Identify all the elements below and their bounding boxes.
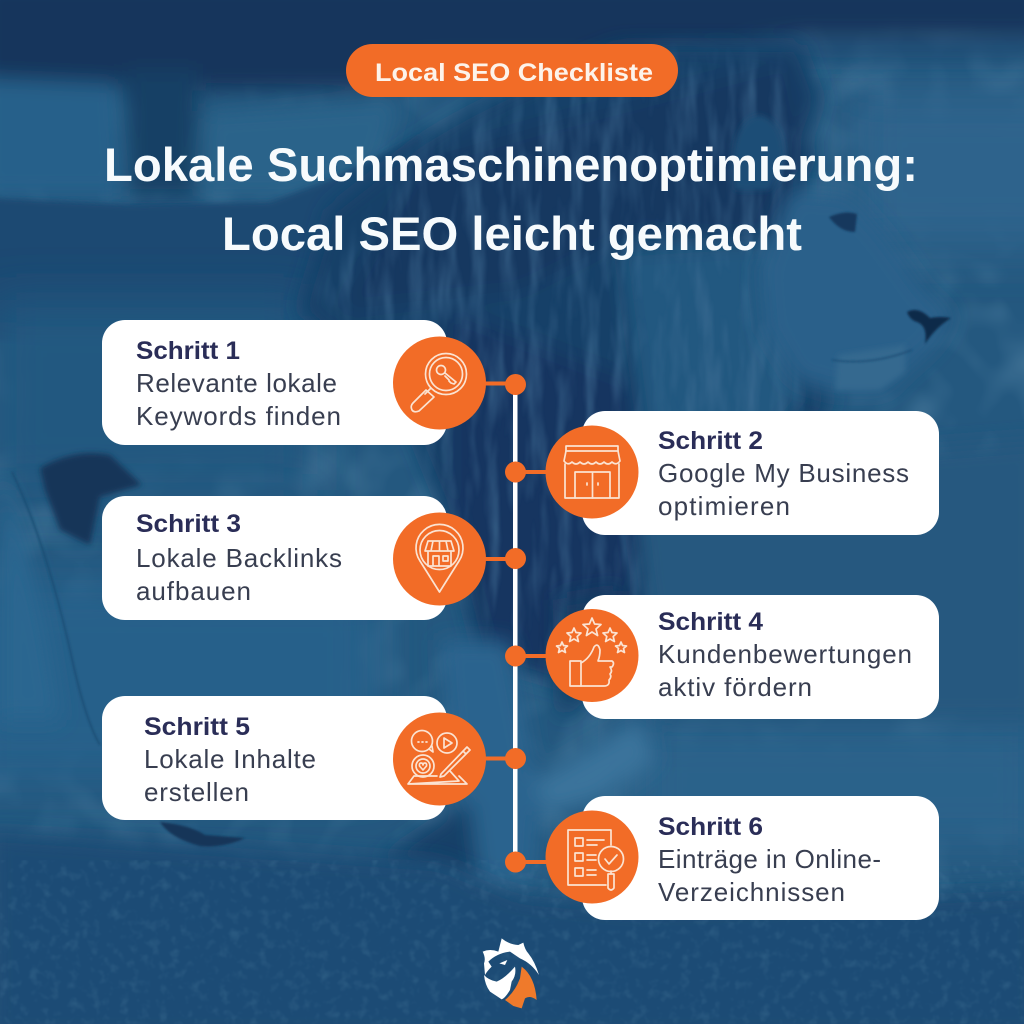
- panel: Schritt 1: Keywords finden: [136, 401, 341, 431]
- header pill: Local SEO Checkliste: [346, 44, 678, 97]
- panel: Schritt 5: Schritt 5: [144, 713, 250, 741]
- panel: Schritt 3: Schritt 3: [136, 510, 241, 538]
- panel: Schritt 1: Schritt 1: [136, 337, 240, 365]
- panel: Schritt 5: [102, 696, 447, 820]
- timeline spine: [480, 374, 550, 872]
- title: Lokale Suchmaschinenoptimierung:: [104, 138, 918, 191]
- soft large tonal zones: [0, 90, 1024, 850]
- panel: Schritt 1: [102, 320, 447, 445]
- icon: magnifier with key: [393, 336, 486, 430]
- panel: Schritt 5: erstellen: [144, 777, 249, 807]
- panel: Schritt 2: Google My Business: [658, 458, 909, 488]
- title: Local SEO leicht gemacht: [222, 207, 802, 260]
- legs and paw: [380, 440, 1024, 885]
- icon: stars and thumbs up: [546, 609, 638, 702]
- ear: [733, 115, 784, 190]
- icon: content creation: [393, 712, 486, 806]
- panel: Schritt 6: [582, 796, 939, 920]
- panel: Schritt 2: Schritt 2: [658, 427, 763, 455]
- panel: Schritt 6: Schritt 6: [658, 813, 763, 841]
- panel: Schritt 6: Verzeichnissen: [658, 877, 845, 907]
- panel: Schritt 3: [102, 496, 447, 620]
- mouth line: [832, 350, 912, 362]
- header pill: Local SEO Checkliste: Local SEO Checkliste: [375, 59, 653, 87]
- title: [104, 138, 918, 260]
- panel: Schritt 4: [582, 595, 939, 719]
- panel: Schritt 5: Lokale Inhalte: [144, 744, 316, 774]
- panel: Schritt 4: aktiv fördern: [658, 672, 812, 702]
- panel: Schritt 3: aufbauen: [136, 576, 251, 606]
- panel: Schritt 4: Kundenbewertungen: [658, 639, 912, 669]
- panel: Schritt 6: Einträge in Online-: [658, 844, 881, 874]
- panel: Schritt 3: Lokale Backlinks: [136, 543, 342, 573]
- icon: location pin with shop: [393, 512, 486, 606]
- eye: [829, 213, 857, 232]
- panel: Schritt 2: optimieren: [658, 491, 790, 521]
- lion back below horizon: [0, 135, 450, 340]
- icon: storefront: [546, 426, 638, 518]
- nose: [907, 310, 951, 344]
- panel: Schritt 4: Schritt 4: [658, 608, 763, 636]
- mane: [300, 45, 830, 700]
- hind leg with dark shade: [0, 480, 60, 720]
- panel: Schritt 1: Relevante lokale: [136, 368, 337, 398]
- logo: lion head: [483, 938, 539, 1008]
- ground: [0, 832, 1024, 1024]
- icon: checklist with magnifier: [546, 810, 638, 904]
- lion face: [760, 190, 952, 392]
- panel: Schritt 2: [582, 411, 939, 535]
